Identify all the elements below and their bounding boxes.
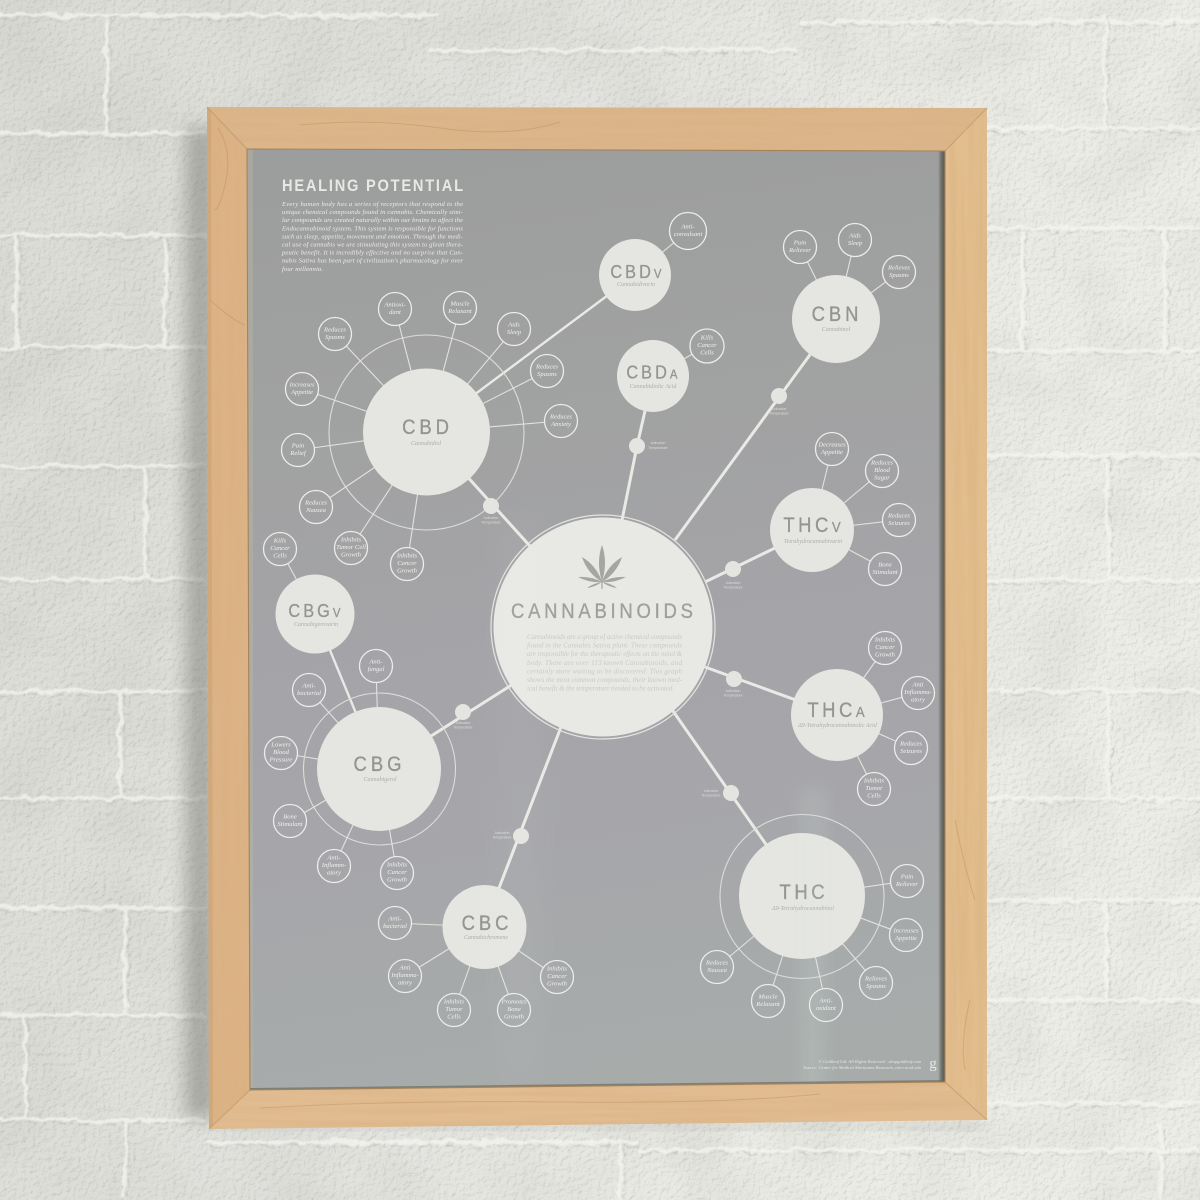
CBDv benefit: Anti- bbox=[680, 224, 695, 230]
THCv benefits: Stimulant bbox=[872, 569, 898, 576]
CBD benefits: Cancer bbox=[397, 560, 417, 567]
THCa benefits: Anti bbox=[912, 682, 924, 688]
CBC benefits: Tumor bbox=[445, 1006, 463, 1013]
CBG benefits: Blood bbox=[273, 749, 290, 756]
CBD benefits: Relaxant bbox=[447, 308, 472, 315]
THCa benefits: Cells bbox=[867, 792, 881, 800]
cluster: CBG bbox=[264, 650, 456, 890]
THC benefits: Muscle bbox=[757, 994, 778, 1000]
CBC hub bbox=[442, 885, 526, 969]
CBD benefits: Reduces bbox=[535, 364, 558, 370]
CBD hub bbox=[363, 368, 490, 496]
CBC benefits: Inflamma- bbox=[390, 972, 419, 979]
CBG hub: CBG bbox=[354, 753, 405, 776]
CBD benefits: Reduces bbox=[304, 500, 327, 506]
CBGv benefit bbox=[264, 532, 315, 614]
CBG benefits: Bone bbox=[283, 814, 297, 820]
CBD benefits: Increases bbox=[288, 382, 315, 388]
CBC benefits: Growth bbox=[547, 980, 568, 988]
THCa benefits: Growth bbox=[875, 652, 896, 658]
poster bbox=[240, 140, 955, 1110]
main description: are responsible for the therapeutic effects on the mind & bbox=[527, 650, 682, 658]
cluster: CBN bbox=[784, 224, 916, 363]
CBG benefits: fungal bbox=[368, 666, 385, 673]
THCv benefits: Appetite bbox=[820, 449, 843, 456]
wood grain bbox=[207, 107, 987, 1129]
CBD hub: CBD bbox=[402, 416, 453, 439]
CBD hub: Cannabidiol bbox=[411, 441, 441, 447]
CBDa hub: Cannabidiolic Acid bbox=[630, 384, 677, 390]
CBG benefits: atory bbox=[327, 870, 341, 876]
THCv benefits: Sugar bbox=[874, 474, 890, 482]
CBC hub: Cannabichromene bbox=[464, 935, 508, 941]
CBG hub: Cannabigerol bbox=[363, 777, 397, 783]
CBD benefits: Growth bbox=[397, 568, 418, 574]
frame shadow bbox=[186, 128, 985, 1129]
THC hub: Δ9-Tetrahydrocannabinol bbox=[771, 906, 834, 912]
CBD benefits: Tumor Cell bbox=[336, 544, 366, 551]
CBC benefits: Inhibits bbox=[546, 966, 568, 972]
CBN hub: Cannabinol bbox=[822, 327, 850, 333]
frame side edge bbox=[207, 107, 213, 1129]
CBC benefits: Promotes bbox=[500, 998, 527, 1006]
main description bbox=[527, 633, 683, 693]
CBD benefits: Aids bbox=[507, 322, 520, 328]
THC benefits: oxidant bbox=[816, 1005, 836, 1012]
CBD benefits: Reduces bbox=[323, 326, 346, 334]
main description: body. There are over 113 known Cannabinoids, and bbox=[527, 659, 682, 667]
THC benefits: Nausea bbox=[706, 967, 728, 974]
THCv benefits: Reduces bbox=[887, 512, 910, 520]
CBG benefits: Cancer bbox=[387, 869, 407, 876]
activation temperature nodes: Activation bbox=[726, 581, 740, 585]
THC benefits: Relieves bbox=[864, 976, 887, 982]
CBGv hub: Cannabigerovarin bbox=[294, 622, 338, 628]
connector: CBGv to CBG bbox=[329, 650, 356, 712]
main description: found in the Cannabis Sativa plant. These compounds bbox=[527, 642, 682, 650]
CBN benefits: Reliever bbox=[788, 247, 811, 254]
intro text block bbox=[281, 201, 463, 273]
connector: CBD to CBDv bbox=[476, 296, 607, 394]
CBDa benefit: Kills bbox=[700, 334, 714, 342]
main description: certainly more waiting to be discovered. This graph bbox=[527, 667, 682, 675]
CBD benefits: Muscle bbox=[449, 300, 470, 308]
THCa benefits: Inhibits bbox=[874, 636, 896, 644]
credits: Source: Center for Medical Marijuana Research, cmcr.ucsd.edu bbox=[803, 1065, 922, 1071]
central hub: cannabinoids bbox=[491, 515, 715, 739]
THCa benefits bbox=[837, 632, 934, 806]
activation temperature nodes: Temperature bbox=[492, 836, 512, 840]
CBD outer ring bbox=[329, 335, 524, 530]
activation temperature nodes: Temperature bbox=[648, 446, 668, 450]
THCv benefits: Seizures bbox=[888, 520, 910, 527]
CBC benefits: bacterial bbox=[383, 923, 407, 930]
CBGv benefit: Cancer bbox=[270, 545, 290, 552]
CBG benefits: Pressure bbox=[269, 756, 293, 764]
heading: healing potential: HEALING POTENTIAL bbox=[282, 177, 463, 195]
frame: bottom rail bbox=[209, 1082, 987, 1129]
intro text block: unique chemical compounds found in cannabis. Chemically simi- bbox=[282, 209, 463, 216]
CBG benefits: Anti- bbox=[368, 658, 383, 666]
THCa benefits: Reduces bbox=[899, 740, 922, 748]
icon: cannabis leaf bbox=[578, 545, 626, 589]
THC benefits bbox=[700, 864, 924, 1022]
THC benefits: Relaxant bbox=[755, 1001, 780, 1008]
CBN benefits: Aids bbox=[848, 232, 861, 240]
CBDa benefit bbox=[684, 328, 725, 364]
logo g: g bbox=[929, 1056, 937, 1072]
THCv hub bbox=[770, 488, 854, 572]
CBD benefits: Pain bbox=[291, 442, 305, 450]
CBD benefits: Anxiety bbox=[550, 421, 571, 428]
trunk connectors from the central hub bbox=[430, 354, 812, 888]
cluster: CBDv bbox=[599, 212, 706, 311]
CBD benefits bbox=[282, 292, 578, 580]
THCa benefits: Tumor bbox=[865, 785, 883, 792]
CBG benefits: Inhibits bbox=[386, 862, 408, 868]
CBC benefits: atory bbox=[398, 980, 412, 986]
activation temperature nodes: Activation bbox=[704, 789, 718, 793]
activation temperature nodes: Activation bbox=[726, 689, 740, 693]
CBD benefits: Relief bbox=[289, 450, 307, 457]
activation temperature nodes bbox=[453, 388, 789, 844]
THCa benefits: Seizures bbox=[900, 748, 922, 755]
cluster: THCv bbox=[770, 432, 916, 586]
intro text block: cal use of cannabis we are stimulating this system to glean thera- bbox=[282, 242, 463, 248]
CBD benefits: Growth bbox=[341, 552, 362, 558]
intro text block: peutic benefit. It is incredibly effective and no surprise that Can- bbox=[281, 250, 463, 257]
THCv benefits: Reduces bbox=[870, 460, 893, 466]
CBDa hub bbox=[617, 340, 689, 412]
CBC benefits bbox=[378, 906, 574, 1026]
THC outer ring bbox=[720, 814, 884, 978]
CBG benefits: Anti- bbox=[301, 682, 316, 690]
CBN hub: CBN bbox=[812, 303, 862, 326]
THCv benefits: Decreases bbox=[817, 442, 846, 448]
activation temperature nodes: Temperature bbox=[701, 794, 721, 798]
credits: © Goldleaf Ltd. All Rights Reserved - shopgoldleaf.com bbox=[818, 1059, 922, 1064]
CBDa benefit: Cells bbox=[700, 350, 714, 356]
THCa benefits: atory bbox=[911, 696, 925, 704]
CBGv benefit: Cells bbox=[273, 552, 287, 560]
main description: shows the most common compounds, their known med- bbox=[527, 676, 683, 684]
CBD benefits: Appetite bbox=[290, 389, 313, 396]
activation temperature nodes: Temperature bbox=[723, 694, 743, 698]
intro text block: such as sleep, appetite, movement and emotion. Through the medi- bbox=[282, 233, 463, 240]
CBDv hub bbox=[599, 239, 671, 311]
CBD benefits: Antioxi- bbox=[383, 302, 406, 308]
CBN benefits bbox=[782, 222, 916, 293]
CBN benefits: Pain bbox=[793, 240, 807, 246]
main description: ical benefit & the temperature needed to be activated. bbox=[527, 685, 674, 693]
CBC benefits: Growth bbox=[504, 1014, 525, 1020]
poster paper bbox=[240, 140, 955, 1095]
THCv benefits: Bone bbox=[878, 562, 892, 568]
THCa benefits: Inhibits bbox=[863, 778, 885, 784]
cluster: THCa bbox=[791, 632, 934, 806]
activation temperature nodes: Activation bbox=[651, 441, 665, 445]
inner rebate bbox=[247, 149, 945, 1090]
credits bbox=[803, 1059, 922, 1071]
cluster: CBDa bbox=[617, 329, 724, 412]
CBG outer ring bbox=[304, 693, 456, 845]
CBG benefits: Growth bbox=[387, 876, 408, 884]
CBG hub bbox=[317, 707, 441, 831]
cluster: CBD bbox=[282, 292, 578, 580]
THCa hub: Δ9-Tetrahydrocannabinolic Acid bbox=[797, 723, 878, 729]
frame: top rail bbox=[207, 107, 987, 151]
THC benefits: Reduces bbox=[705, 960, 728, 966]
CBN benefits: Relieves bbox=[887, 264, 910, 272]
frame: right rail bbox=[945, 108, 987, 1120]
CBDa benefit: Cancer bbox=[697, 342, 717, 349]
THCv benefits bbox=[812, 432, 916, 586]
cluster: THC bbox=[700, 814, 924, 1022]
CBD benefits: Sleep bbox=[507, 329, 522, 336]
CBC benefits: Anti bbox=[398, 964, 411, 972]
CBD benefits: Inhibits bbox=[340, 536, 362, 544]
CBGv hub bbox=[276, 574, 354, 654]
activation temperature nodes: Temperature bbox=[453, 726, 473, 730]
CBC benefits: Anti- bbox=[387, 916, 402, 922]
CBN hub bbox=[792, 275, 880, 363]
THC benefits: Appetite bbox=[894, 935, 917, 942]
THC hub: THC bbox=[780, 881, 828, 904]
CBD benefits: Nausea bbox=[305, 507, 327, 514]
intro text block: four millennia. bbox=[282, 266, 323, 273]
wood figure lines bbox=[210, 122, 975, 1108]
CBD benefits: dant bbox=[389, 309, 401, 316]
THC benefits: Spasms bbox=[866, 983, 886, 990]
CBC hub: CBC bbox=[462, 912, 512, 935]
CBG benefits: Lowers bbox=[270, 742, 291, 748]
CBDv hub: Cannabidivarin bbox=[617, 282, 655, 288]
cluster: CBC bbox=[378, 885, 574, 1026]
THC benefits: Anti- bbox=[818, 998, 833, 1004]
CBDv hub: CBDV bbox=[610, 261, 665, 282]
THC benefits: Increases bbox=[892, 928, 919, 934]
THC benefits: Pain bbox=[900, 874, 914, 880]
CBC benefits: Bone bbox=[507, 1006, 521, 1013]
miter seams bbox=[207, 107, 987, 1129]
wooden frame bbox=[207, 107, 987, 1129]
activation temperature nodes: Temperature bbox=[481, 520, 501, 524]
CBD benefits: Spasms bbox=[325, 334, 345, 341]
CBD benefits: Reduces bbox=[549, 414, 572, 420]
activation temperature nodes: Temperature bbox=[769, 412, 789, 416]
frame: left rail bbox=[207, 107, 250, 1129]
THCa hub bbox=[791, 669, 883, 761]
THCv hub: THCV bbox=[783, 514, 844, 537]
THCa benefits: Cancer bbox=[875, 644, 895, 651]
intro text block: Endocannabinoid system. This system is responsible for functions bbox=[281, 225, 463, 232]
activation temperature nodes: Temperature bbox=[723, 586, 743, 590]
CBG benefits: bacterial bbox=[297, 690, 321, 697]
CBGv hub: CBGV bbox=[288, 600, 344, 621]
CBG benefits bbox=[264, 650, 414, 890]
CBDv benefit: convulsant bbox=[674, 231, 702, 238]
CBDa hub: CBDA bbox=[626, 362, 681, 383]
CBG benefits: Anti- bbox=[326, 854, 341, 862]
activation temperature nodes: Activation bbox=[772, 407, 786, 411]
THCv benefits: Blood bbox=[874, 467, 891, 474]
CBGv benefit: Kills bbox=[273, 538, 287, 544]
CBD benefits: Spasms bbox=[537, 371, 557, 378]
main title: CANNABINOIDS bbox=[511, 600, 693, 623]
activation temperature nodes: Activation bbox=[484, 516, 498, 520]
CBN benefits: Sleep bbox=[848, 240, 863, 247]
THCa benefits: Inflamma- bbox=[903, 689, 932, 696]
intro text block: Every human body has a series of receptors that respond to the bbox=[281, 201, 463, 208]
cluster: CBGv bbox=[264, 532, 354, 654]
THCv hub: Tetrahydrocannabivarin bbox=[784, 539, 842, 545]
CBN benefits: Spasms bbox=[889, 272, 909, 279]
CBD benefits: Inhibits bbox=[396, 552, 418, 560]
activation temperature nodes: Activation bbox=[495, 831, 509, 835]
CBDv benefit bbox=[662, 212, 708, 252]
THC hub bbox=[739, 833, 865, 959]
THC benefits: Reliever bbox=[895, 881, 918, 888]
CBC benefits: Cancer bbox=[547, 973, 567, 980]
CBG benefits: Inflamm- bbox=[321, 862, 346, 869]
CBC benefits: Cells bbox=[447, 1014, 461, 1020]
CBC benefits: Inhibits bbox=[443, 998, 465, 1006]
intro text block: lar compounds are created naturally within our brains to affect the bbox=[282, 217, 463, 224]
glass glare bbox=[247, 149, 946, 1110]
activation temperature nodes: Activation bbox=[456, 721, 470, 725]
THCa hub: THCA bbox=[807, 699, 868, 722]
CBG benefits: Stimulant bbox=[277, 821, 303, 828]
main description: Cannabinoids are a group of active chemical compounds bbox=[527, 633, 682, 641]
intro text block: nabis Sativa has been part of civilization's pharmacology for over bbox=[282, 258, 463, 265]
